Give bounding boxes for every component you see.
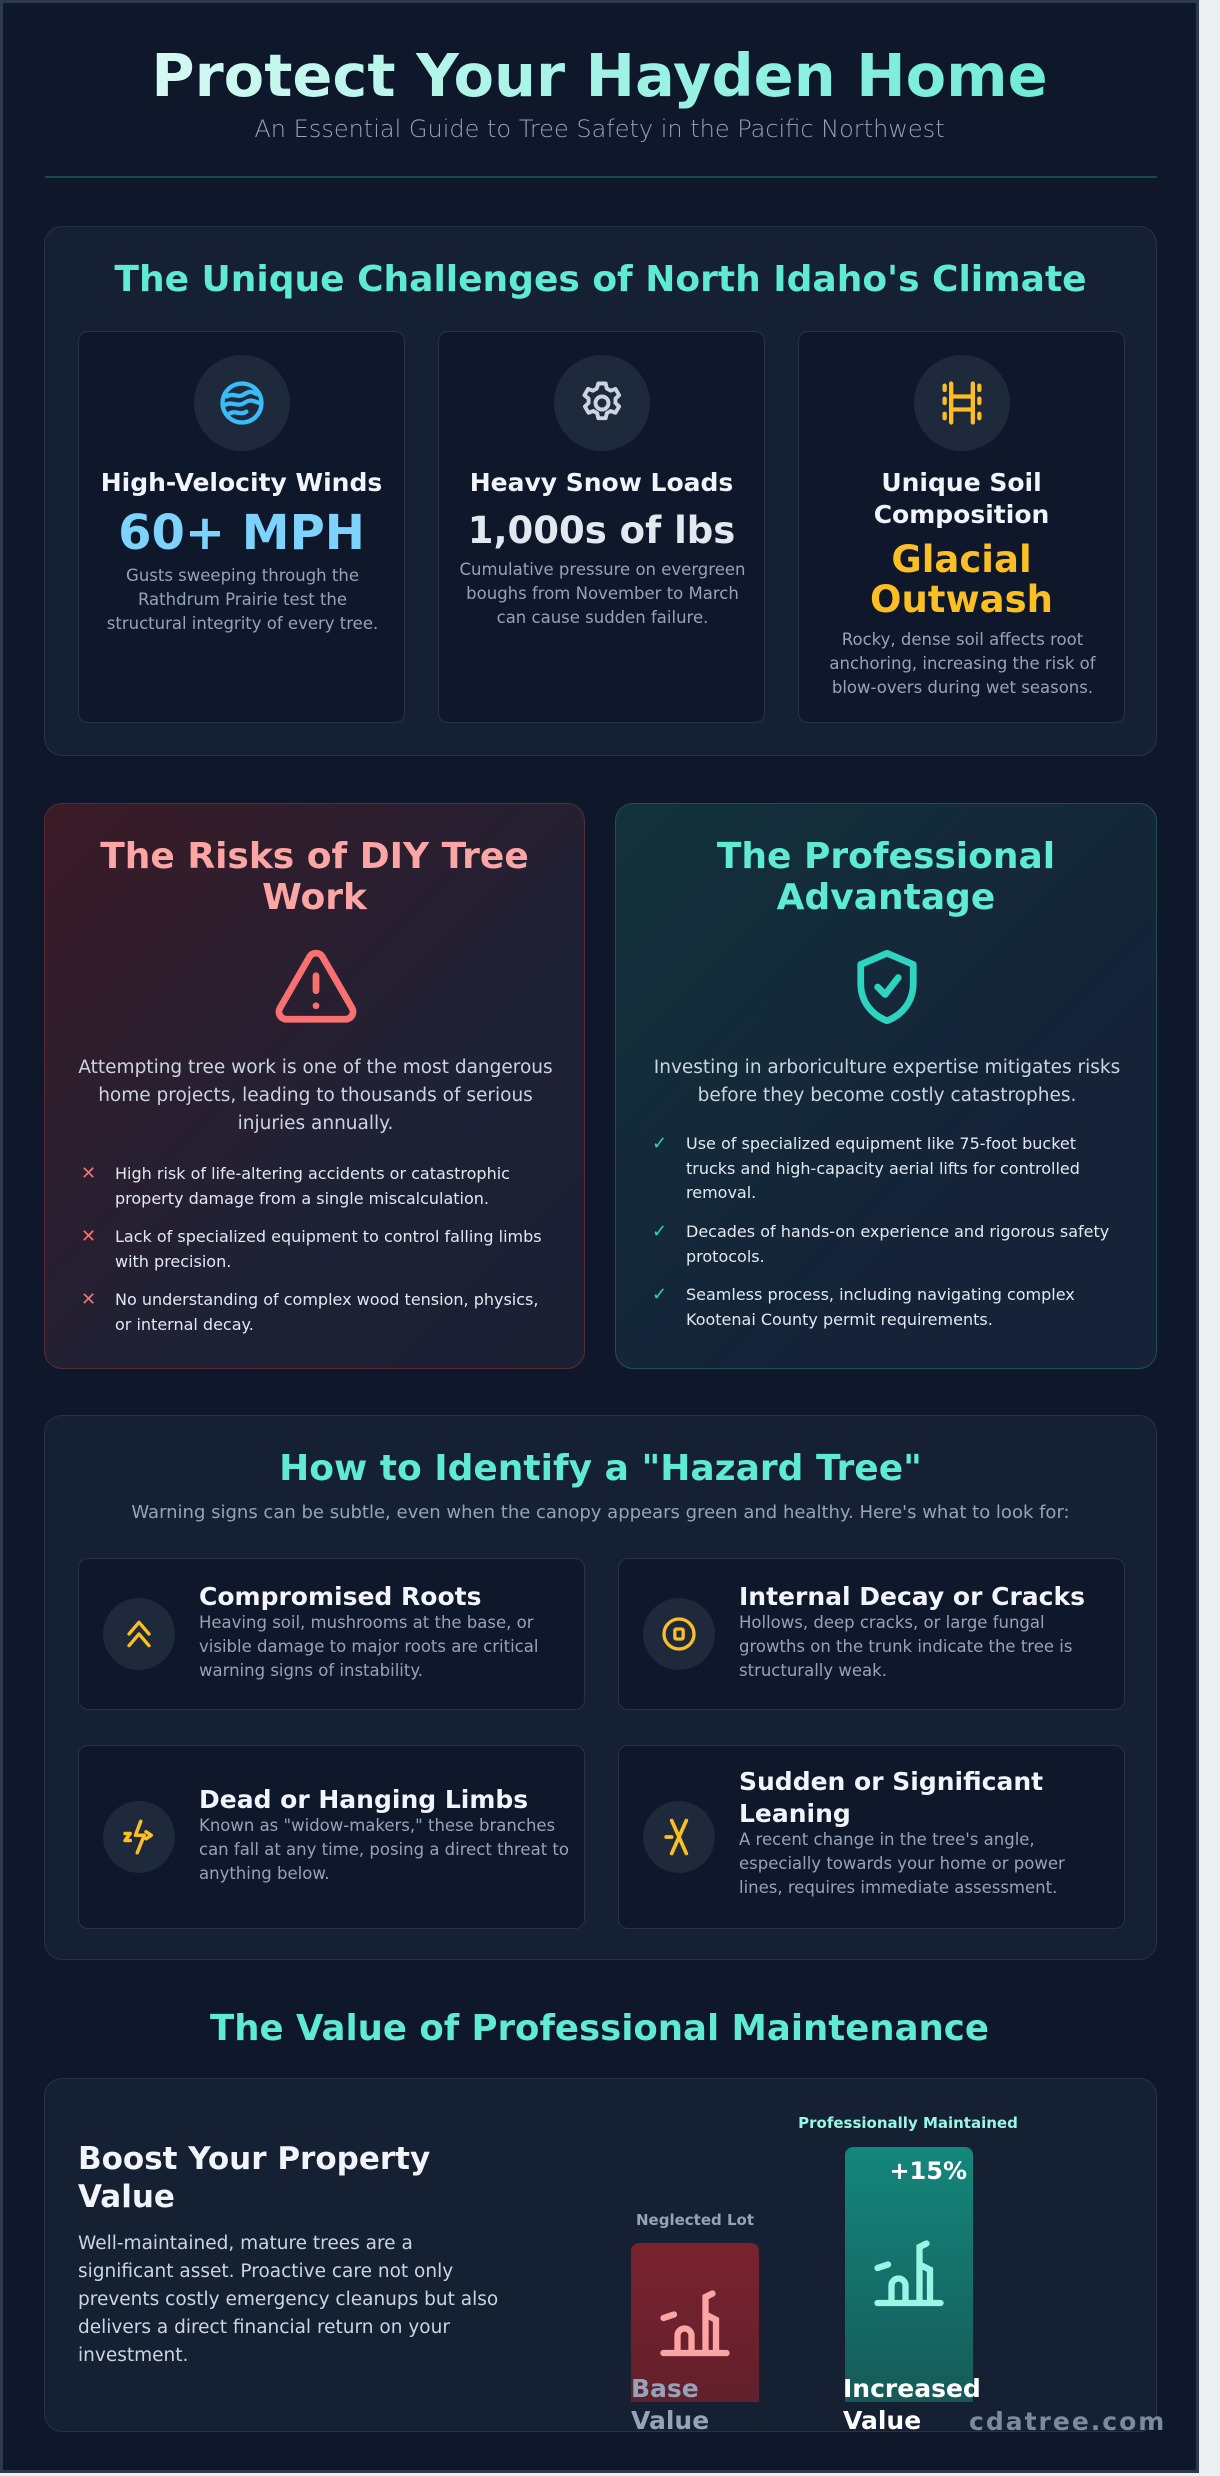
heading: risks: The Risks of DIY Tree	[100, 836, 529, 877]
item: Decades of hands-on experience and rigorous safety protocols.	[686, 1222, 1109, 1266]
icon: warning	[276, 950, 356, 1023]
label: base value: Value	[631, 2406, 709, 2435]
text	[739, 1582, 1085, 1680]
label: base value	[631, 2374, 709, 2435]
stat: Glacial	[891, 538, 1032, 581]
bar: base	[631, 2243, 759, 2402]
text: Known as "widow-makers," these branches can fall at any time, posing a direct threat to anything below.	[199, 1816, 569, 1883]
card: roots	[78, 1558, 585, 1710]
panel: hazard tree	[44, 1415, 1157, 1960]
item: Use of specialized equipment like 75-foot bucket trucks and high-capacity aerial lifts for controlled removal.	[686, 1134, 1080, 1202]
icon: soil	[914, 355, 1010, 451]
card title: Unique Soil	[881, 468, 1042, 497]
paragraph: Well-maintained, mature trees are a	[78, 2233, 413, 2254]
heading: climate: The Unique Challenges of North Idaho's Climate	[114, 259, 1087, 300]
subtitle: An Essential Guide to Tree Safety in the Pacific Northwest	[254, 115, 945, 143]
card: limbs	[78, 1745, 585, 1929]
stat: 60+ MPH	[118, 505, 365, 561]
bar chart	[631, 2114, 1018, 2435]
card title: Heavy Snow Loads	[470, 468, 733, 497]
panel: professional advantage: ✓	[652, 1221, 667, 1242]
title: Protect Your Hayden Home	[151, 41, 1048, 110]
text: Sudden or Significant Leaning	[739, 1767, 1043, 1828]
benefit list	[652, 1133, 1109, 1328]
icon: roots	[103, 1598, 175, 1670]
item: Seamless process, including navigating complex Kootenai County permit requirements.	[686, 1285, 1075, 1328]
description: Cumulative pressure on evergreen boughs from November to March can cause sudden failure.	[460, 560, 745, 627]
bar: increased	[845, 2147, 973, 2402]
card title: High-Velocity Winds	[101, 468, 382, 497]
panel: DIY risks: ✕	[81, 1226, 96, 1247]
footer brand: cdatree.com	[969, 2407, 1166, 2436]
heading: advantage	[717, 836, 1055, 918]
heading: risks: Work	[262, 877, 367, 918]
label: increased value	[843, 2374, 981, 2435]
text	[199, 1582, 538, 1680]
heading: value: The Value of Professional Maintenance	[210, 2008, 989, 2049]
card: snow	[438, 331, 765, 723]
panel: DIY risks: ✕	[81, 1163, 96, 1184]
paragraph: Investing in arboriculture expertise mitigates risks before they become costly catastrophes.	[654, 1057, 1120, 1106]
item: High risk of life-altering accidents or catastrophic property damage from a single miscalculation.	[115, 1164, 510, 1208]
icon: lightning	[103, 1801, 175, 1873]
icon: leaning	[643, 1801, 715, 1873]
paragraph: significant asset. Proactive care not only prevents costly emergency cleanups but also delivers a direct financial return on your investment.	[78, 2261, 498, 2366]
stat: 1,000s of lbs	[468, 509, 735, 552]
icon: wind	[194, 355, 290, 451]
panel: property value	[44, 2078, 1157, 2432]
panel: professional advantage: ✓	[652, 1284, 667, 1305]
text: Heaving soil, mushrooms at the base, or visible damage to major roots are critical warning signs of instability.	[199, 1613, 538, 1680]
label: neglected: Neglected Lot	[636, 2211, 754, 2229]
label: maintained: Professionally Maintained	[798, 2114, 1018, 2132]
text: Dead or Hanging Limbs	[199, 1785, 528, 1814]
panel: DIY risks	[44, 803, 585, 1369]
heading: advantage: The Professional	[717, 836, 1055, 877]
text: Hollows, deep cracks, or large fungal growths on the trunk indicate the tree is structurally weak.	[739, 1613, 1072, 1680]
card title: Composition	[874, 500, 1049, 529]
text: Internal Decay or Cracks	[739, 1582, 1085, 1611]
panel: professional advantage	[615, 803, 1157, 1369]
text	[199, 1785, 569, 1883]
description: Gusts sweeping through the Rathdrum Prairie test the structural integrity of every tree.	[107, 566, 378, 633]
heading: advantage: Advantage	[777, 877, 995, 918]
stat	[870, 538, 1053, 621]
description: Rocky, dense soil affects root anchoring, increasing the risk of blow-overs during wet seasons.	[829, 630, 1096, 697]
label: increased value: Value	[843, 2406, 921, 2435]
bar: increased: +15%	[889, 2157, 967, 2185]
stat: Outwash	[870, 578, 1053, 621]
panel: climate challenges	[44, 226, 1157, 756]
heading: boost: Boost Your Property Value	[78, 2141, 430, 2215]
title	[3, 38, 1196, 114]
paragraph: Attempting tree work is one of the most dangerous home projects, leading to thousands of serious injuries annually.	[78, 1057, 553, 1134]
label: base value: Base	[631, 2374, 699, 2403]
heading: hazard: How to Identify a "Hazard Tree"	[279, 1448, 922, 1489]
text: Compromised Roots	[199, 1582, 481, 1611]
card: decay	[618, 1558, 1125, 1710]
icon: decay	[643, 1598, 715, 1670]
panel: professional advantage: ✓	[652, 1133, 667, 1154]
card title	[874, 468, 1049, 529]
item: Lack of specialized equipment to control falling limbs with precision.	[115, 1227, 542, 1270]
icon: shield	[857, 950, 917, 1024]
label: increased value: Increased	[843, 2374, 981, 2403]
card: winds	[78, 331, 405, 723]
item: No understanding of complex wood tension, physics, or internal decay.	[115, 1290, 538, 1334]
icon: gear	[554, 355, 650, 451]
text	[739, 1767, 1065, 1897]
risk list	[81, 1163, 542, 1334]
card: soil	[798, 331, 1125, 723]
panel: DIY risks: ✕	[81, 1289, 96, 1310]
heading: risks	[100, 836, 529, 918]
subtitle: Warning signs can be subtle, even when the canopy appears green and healthy. Here's what to look for:	[131, 1502, 1070, 1523]
card: leaning	[618, 1745, 1125, 1929]
text: A recent change in the tree's angle, especially towards your home or power lines, requires immediate assessment.	[739, 1830, 1065, 1897]
